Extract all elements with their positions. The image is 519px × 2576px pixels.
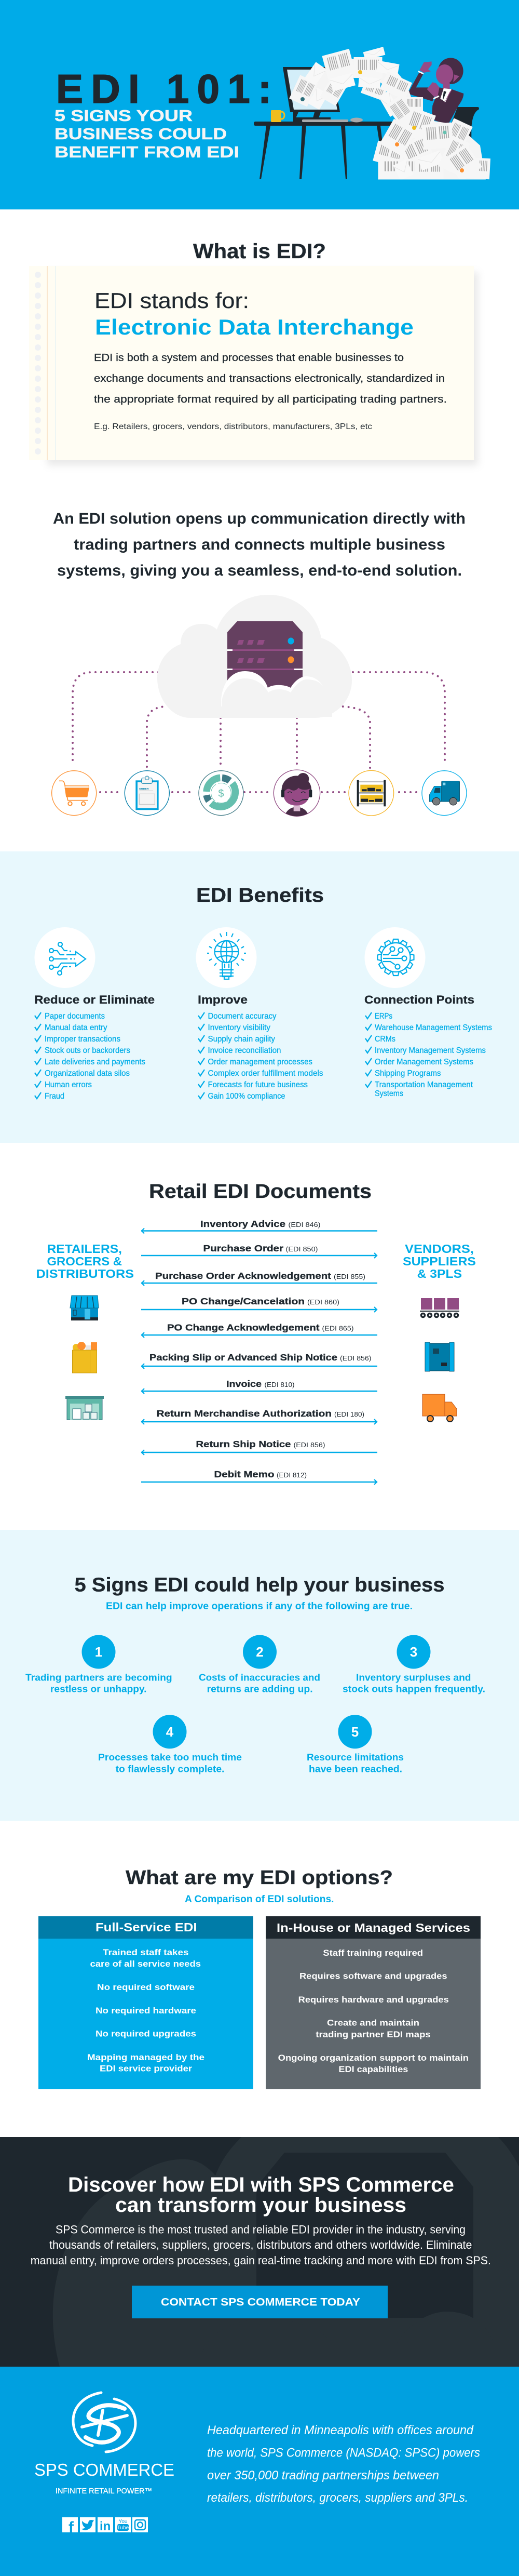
row: Return Merchandise Authorization: Return Merchandise Authorization <box>157 1408 332 1419</box>
icon: store <box>70 1296 99 1320</box>
heading: What is EDI?: What is EDI? <box>193 240 326 263</box>
sign 1: restless or unhappy. <box>50 1683 146 1694</box>
watermark: cloud and server <box>53 2137 519 2367</box>
row: Debit Memo: (EDI 812) <box>277 1471 307 1479</box>
row: Purchase Order <box>141 1243 377 1258</box>
icon: front cloud <box>221 671 332 717</box>
checklist: Invoice reconciliation <box>208 1046 281 1055</box>
row: Invoice <box>141 1379 377 1394</box>
row: Purchase Order Acknowledgement: Purchase Order Acknowledgement <box>155 1271 331 1281</box>
icon: circuit gear <box>378 939 414 976</box>
subtitle <box>54 106 239 161</box>
label: retailers: DISTRIBUTORS <box>36 1267 134 1280</box>
checklist: Supply chain agility <box>208 1035 275 1044</box>
icon: youtube: Tube <box>117 2525 129 2531</box>
checklist <box>365 1012 492 1098</box>
column: in-house or managed services: Ongoing organization support to maintain <box>278 2053 469 2063</box>
row: Debit Memo <box>141 1469 377 1485</box>
checklist: Forecasts for future business <box>208 1080 308 1089</box>
statement: what an EDI solution does <box>53 510 466 579</box>
icon: facebook <box>62 2517 78 2536</box>
icon: delivery truck <box>422 771 467 816</box>
column: in-house or managed services: Requires hardware and upgrades <box>298 1995 449 2005</box>
sign 2 <box>199 1635 320 1694</box>
checklist: Organizational data silos <box>45 1069 130 1078</box>
icon: instagram <box>132 2517 148 2532</box>
row: Purchase Order Acknowledgement: (EDI 855) <box>334 1273 365 1280</box>
sign 1: Trading partners are becoming <box>25 1672 172 1683</box>
icon: monitor <box>283 68 339 122</box>
logo: SPS Commerce: SPS COMMERCE <box>34 2460 174 2479</box>
social icons <box>62 2517 148 2536</box>
checklist: Systems <box>375 1089 403 1098</box>
row: PO Change/Cancelation <box>141 1296 377 1312</box>
icon: boxes on conveyor <box>420 1298 459 1317</box>
column: full-service EDI: care of all service needs <box>90 1959 201 1969</box>
row: PO Change Acknowledgement: (EDI 865) <box>322 1325 354 1332</box>
row: Return Merchandise Authorization <box>141 1408 377 1424</box>
icon: server <box>227 621 303 699</box>
logo: SPS Commerce: INFINITE RETAIL POWER™ <box>56 2487 152 2495</box>
column: in-house or managed services: EDI capabilities <box>338 2065 408 2074</box>
icon: loading dock door <box>425 1342 454 1371</box>
panel: footer <box>0 2367 519 2576</box>
heading: What are my EDI options? <box>126 1867 393 1889</box>
sub-heading: EDI can help improve operations if any of the following are true. <box>106 1601 413 1612</box>
column: connection points <box>364 927 492 1098</box>
subtitle: BUSINESS COULD <box>54 125 227 143</box>
column: in-house or managed services <box>266 1916 481 2089</box>
column: full-service EDI: Trained staff takes <box>103 1948 189 1957</box>
company summary <box>207 2423 480 2505</box>
checklist: Shipping Programs <box>375 1069 441 1078</box>
column: full-service EDI: Full-Service EDI <box>95 1920 197 1934</box>
icon: keyboard and mouse <box>302 117 363 123</box>
checklist: Transportation Management <box>375 1080 473 1089</box>
sign 1 <box>25 1635 172 1694</box>
icon: coffee mug <box>271 110 284 122</box>
definition body <box>94 352 447 405</box>
column: full-service EDI: No required hardware <box>95 2006 196 2016</box>
row: Return Ship Notice: (EDI 856) <box>294 1441 325 1449</box>
heading: Discover how EDI with SPS Commerce <box>68 2173 454 2196</box>
checklist: Gain 100% compliance <box>208 1092 285 1101</box>
sign 5 <box>307 1715 404 1774</box>
statement: what an EDI solution does: systems, giving you a seamless, end-to-end solution. <box>57 562 462 579</box>
panel: retail EDI documents <box>36 1181 476 1485</box>
label: retailers: GROCERS & <box>47 1254 122 1268</box>
sign 5: Resource limitations <box>307 1752 404 1763</box>
icon: circuit arrow <box>49 942 86 975</box>
sign 3: Inventory surpluses and <box>356 1672 471 1683</box>
row: Inventory Advice <box>141 1219 377 1233</box>
sign 2: Costs of inaccuracies and <box>199 1672 320 1683</box>
sign 4 <box>98 1715 242 1774</box>
icon: orange truck <box>422 1394 457 1422</box>
label: vendors: VENDORS, <box>405 1242 474 1256</box>
icon: desk <box>254 122 393 179</box>
illustration: desk, monitor and worker buried in paper <box>254 47 490 182</box>
company summary: retailers, distributors, grocers, suppliers and 3PLs. <box>207 2491 468 2505</box>
button <box>132 2286 388 2318</box>
label: retailers: RETAILERS, <box>47 1242 122 1256</box>
diagram: cloud server connected to business systems <box>52 595 467 830</box>
panel: notebook definition card <box>29 266 478 465</box>
icon: dollar ring chart <box>199 771 243 816</box>
subtitle: 5 SIGNS YOUR <box>54 106 193 125</box>
checklist: Stock outs or backorders <box>45 1046 130 1055</box>
sign 5: have been reached. <box>309 1763 402 1774</box>
icon: linkedin <box>98 2517 113 2533</box>
checklist: Order Management Systems <box>375 1058 473 1066</box>
icon: flying paper stream <box>289 47 490 182</box>
column: full-service EDI: EDI service provider <box>100 2064 193 2074</box>
heading: EDI Benefits <box>196 885 324 906</box>
statement: what an EDI solution does: trading partners and connects multiple business <box>74 536 445 553</box>
column: full-service EDI: Mapping managed by the <box>87 2053 204 2062</box>
checklist: ERPs <box>375 1012 392 1021</box>
company summary: Headquartered in Minneapolis with offices around <box>207 2423 474 2437</box>
checklist: Improper transactions <box>45 1035 120 1044</box>
definition body: EDI is both a system and processes that enable businesses to <box>94 352 404 364</box>
sign 2: returns are adding up. <box>207 1683 313 1694</box>
definition body: exchange documents and transactions electronically, standardized in <box>94 373 445 384</box>
button: CONTACT SPS COMMERCE TODAY <box>161 2297 360 2308</box>
icon: warehouse shelves <box>349 770 394 816</box>
column: in-house or managed services: In-House or Managed Services <box>277 1921 470 1934</box>
icon: grocery bag <box>73 1342 97 1373</box>
column: in-house or managed services: Staff training required <box>323 1948 423 1958</box>
row: Packing Slip or Advanced Ship Notice <box>141 1352 377 1369</box>
sign 2: 2 <box>256 1644 264 1660</box>
row: Inventory Advice: (EDI 846) <box>289 1221 321 1229</box>
row: Inventory Advice: Inventory Advice <box>200 1219 285 1229</box>
row: Packing Slip or Advanced Ship Notice: (EDI 856) <box>340 1354 372 1362</box>
checklist: Manual data entry <box>45 1023 107 1032</box>
row: Invoice: Invoice <box>226 1379 262 1389</box>
row: Return Merchandise Authorization: (EDI 180) <box>334 1410 364 1418</box>
panel: EDI benefits <box>0 851 519 1143</box>
sign 3 <box>343 1635 485 1694</box>
company summary: over 350,000 trading partnerships between <box>207 2468 439 2482</box>
label: vendors: SUPPLIERS <box>403 1254 476 1268</box>
icon: youtube: You <box>119 2519 127 2525</box>
column: full-service EDI <box>38 1916 253 2089</box>
definition term: Electronic Data Interchange <box>95 315 414 339</box>
icon: order clipboard: ORDER <box>139 788 149 790</box>
sub-heading: Reduce or Eliminate <box>34 993 155 1006</box>
definition body: the appropriate format required by all participating trading partners. <box>94 394 447 405</box>
checklist: Order management processes <box>208 1058 312 1066</box>
company description <box>31 2223 491 2267</box>
definition lead-in: EDI stands for: <box>94 288 249 313</box>
column: full-service EDI: No required upgrades <box>95 2030 196 2039</box>
checklist: Warehouse Management Systems <box>375 1023 492 1032</box>
panel: five signs <box>0 1530 519 1821</box>
sub-heading: Connection Points <box>364 993 474 1006</box>
statement: what an EDI solution does: An EDI solution opens up communication directly with <box>53 510 466 527</box>
row: PO Change/Cancelation: PO Change/Cancelation <box>182 1296 305 1306</box>
icon: SPS mark <box>73 2393 135 2452</box>
heading: can transform your business <box>115 2194 406 2217</box>
panel: call to action <box>0 2137 519 2367</box>
row: Invoice: (EDI 810) <box>265 1381 295 1389</box>
title: EDI 101: <box>56 66 271 112</box>
row: Purchase Order Acknowledgement <box>141 1271 377 1286</box>
icon: shopping cart <box>52 771 97 816</box>
label: vendors: & 3PLS <box>417 1267 462 1280</box>
icon: facebook: f <box>69 2519 74 2536</box>
sign 4: 4 <box>166 1724 174 1740</box>
row: Return Ship Notice: Return Ship Notice <box>196 1439 291 1449</box>
company description: SPS Commerce is the most trusted and reliable EDI provider in the industry, serving <box>56 2223 466 2236</box>
column: full-service EDI: No required software <box>97 1983 195 1992</box>
company description: thousands of retailers, suppliers, grocers, distributors and others worldwide. Eliminate <box>49 2238 472 2251</box>
column: in-house or managed services: Requires software and upgrades <box>299 1972 447 1981</box>
checklist: Inventory visibility <box>208 1023 270 1032</box>
label: retailers <box>36 1242 134 1280</box>
panel: hero banner <box>0 0 519 210</box>
company description: manual entry, improve orders processes, gain real-time tracking and more with EDI from SPS. <box>31 2254 491 2267</box>
checklist: Document accuracy <box>208 1012 277 1021</box>
checklist: Inventory Management Systems <box>375 1046 486 1055</box>
heading: 5 Signs EDI could help your business <box>75 1574 445 1596</box>
sub-heading: A Comparison of EDI solutions. <box>185 1894 334 1905</box>
company summary: the world, SPS Commerce (NASDAQ: SPSC) powers <box>207 2446 480 2460</box>
examples note: E.g. Retailers, grocers, vendors, distributors, manufacturers, 3PLs, etc <box>94 422 372 431</box>
checklist: Human errors <box>45 1080 92 1089</box>
heading <box>68 2173 454 2217</box>
icon: twitter <box>80 2517 95 2532</box>
checklist: Late deliveries and payments <box>45 1058 145 1066</box>
icon: globe light bulb <box>207 932 246 979</box>
icon: dollar ring chart: $ <box>218 788 224 799</box>
checklist: CRMs <box>375 1035 395 1044</box>
subtitle: BENEFIT FROM EDI <box>54 143 239 161</box>
checklist: Fraud <box>45 1092 64 1101</box>
icon: youtube <box>115 2517 131 2532</box>
icon: order clipboard <box>125 771 169 816</box>
row: Debit Memo: Debit Memo <box>214 1469 274 1479</box>
column: reduce or eliminate <box>34 927 155 1101</box>
heading: Retail EDI Documents <box>149 1181 372 1203</box>
checklist: Complex order fulfillment models <box>208 1069 323 1078</box>
sign 3: stock outs happen frequently. <box>343 1683 485 1694</box>
icon: chair <box>452 107 479 147</box>
dotted connectors <box>73 672 445 792</box>
column: improve <box>196 927 323 1101</box>
label: vendors <box>403 1242 476 1280</box>
sign 4: to flawlessly complete. <box>116 1763 224 1774</box>
sign 5: 5 <box>351 1724 359 1740</box>
row: Return Ship Notice <box>141 1439 377 1455</box>
panel: EDI options comparison <box>38 1867 481 2089</box>
row: PO Change Acknowledgement <box>141 1323 377 1338</box>
column: in-house or managed services: Create and maintain <box>327 2019 419 2028</box>
row: PO Change/Cancelation: (EDI 860) <box>307 1298 339 1306</box>
document flow rows <box>141 1219 377 1485</box>
logo: SPS Commerce <box>34 2393 174 2495</box>
icon: warehouse <box>65 1396 104 1420</box>
row: PO Change Acknowledgement: PO Change Acknowledgement <box>167 1323 320 1333</box>
sign 3: 3 <box>410 1644 417 1660</box>
row: Purchase Order: Purchase Order <box>203 1243 283 1253</box>
row: Packing Slip or Advanced Ship Notice: Packing Slip or Advanced Ship Notice <box>149 1352 337 1363</box>
icon: cloud <box>157 595 352 718</box>
row: Purchase Order: (EDI 850) <box>285 1245 318 1253</box>
checklist: Paper documents <box>45 1012 105 1021</box>
sub-heading: Improve <box>198 993 248 1006</box>
icon: linkedin: in <box>100 2519 111 2533</box>
icon: stressed worker <box>408 58 463 125</box>
sign 1: 1 <box>95 1644 102 1660</box>
icon: support agent <box>273 769 321 817</box>
checklist <box>198 1012 323 1101</box>
checklist <box>35 1012 145 1101</box>
column: in-house or managed services: trading partner EDI maps <box>316 2030 431 2039</box>
sign 4: Processes take too much time <box>98 1752 242 1763</box>
